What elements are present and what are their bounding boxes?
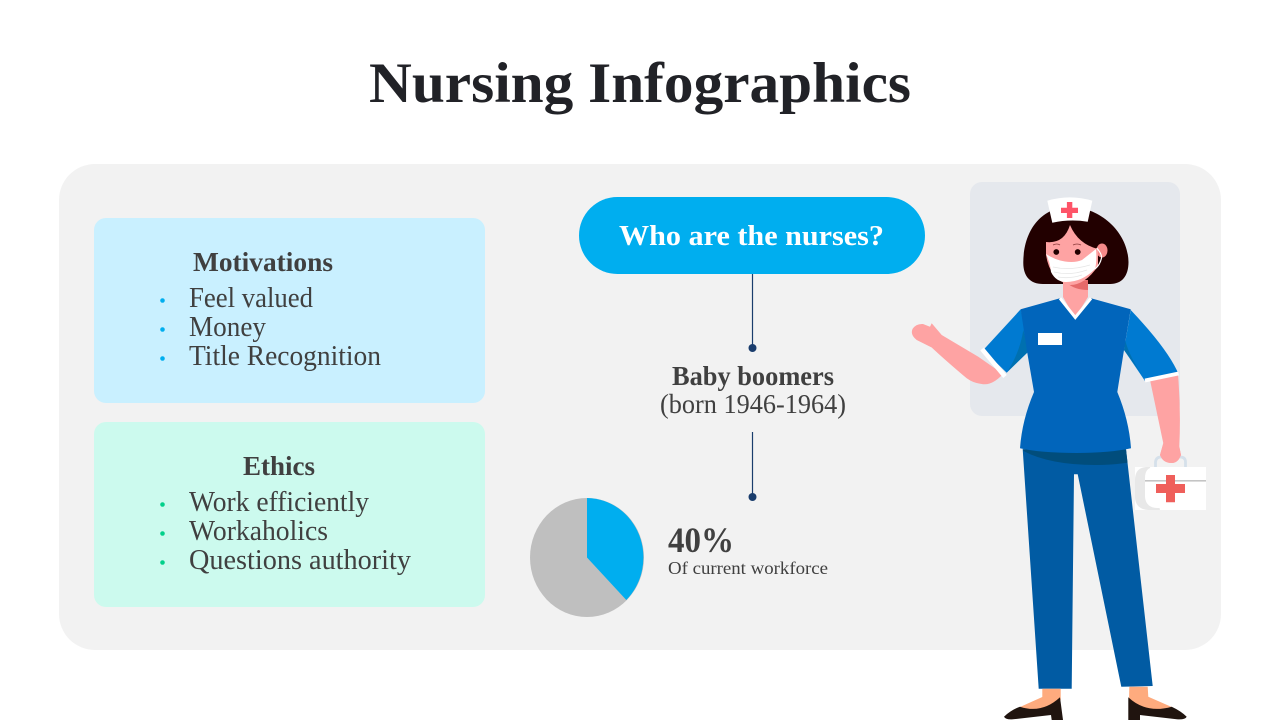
nurse: right sleeve [1124, 310, 1178, 381]
list: ethics: Questions authority [189, 545, 411, 576]
nurse: left sleeve [982, 309, 1030, 376]
list: ethics: Work efficiently [189, 487, 369, 518]
connector: callout to baby boomers [748, 274, 756, 352]
stat: 40 percent of current workforce: 40% [668, 520, 734, 560]
nurse: ear [1096, 244, 1108, 258]
title: Nursing Infographics [369, 52, 911, 115]
nurse: name badge [1038, 333, 1062, 345]
connector: baby boomers to pie [748, 432, 756, 501]
nurse: neck [1063, 280, 1088, 318]
nurse: right shoe [1128, 697, 1187, 720]
list: ethics: Workaholics [189, 516, 328, 547]
stat: 40 percent of current workforce: Of current workforce [668, 558, 828, 578]
nurse: face [1046, 225, 1098, 285]
list: motivations: Money [189, 312, 266, 343]
heading: ethics: Ethics [243, 451, 315, 481]
text: baby boomers [660, 361, 846, 419]
nurse: eyes and brows [1053, 244, 1081, 255]
background panel [59, 164, 1221, 650]
nurse: tunic [1020, 298, 1131, 453]
text: baby boomers: Baby boomers [672, 361, 834, 391]
backdrop panel behind nurse [970, 182, 1180, 416]
panel: ethics [94, 422, 485, 607]
pie chart: 40 percent [530, 498, 644, 617]
list: motivations: Feel valued [189, 283, 313, 314]
callout: who are the nurses [579, 197, 925, 274]
list: ethics [160, 487, 411, 576]
panel: motivations [94, 218, 485, 403]
nurse: face mask [1046, 248, 1102, 282]
nurse: ankles [1020, 687, 1172, 712]
nurse: lowered arm [1150, 374, 1181, 463]
nurse: medical kit [1135, 443, 1206, 510]
nurse: trousers [1023, 449, 1153, 689]
stat: 40 percent of current workforce [668, 520, 828, 578]
illustration: nurse [912, 197, 1206, 720]
nurse: left shoe [1004, 697, 1063, 720]
nurse: cap [1047, 197, 1092, 223]
nurse: hair [1023, 207, 1128, 284]
text: baby boomers: (born 1946-1964) [660, 389, 846, 419]
nurse: raised arm [912, 323, 1003, 384]
heading: motivations: Motivations [193, 247, 333, 277]
callout: who are the nurses: Who are the nurses? [619, 220, 884, 252]
list: motivations [160, 283, 381, 372]
list: motivations: Title Recognition [189, 341, 381, 372]
